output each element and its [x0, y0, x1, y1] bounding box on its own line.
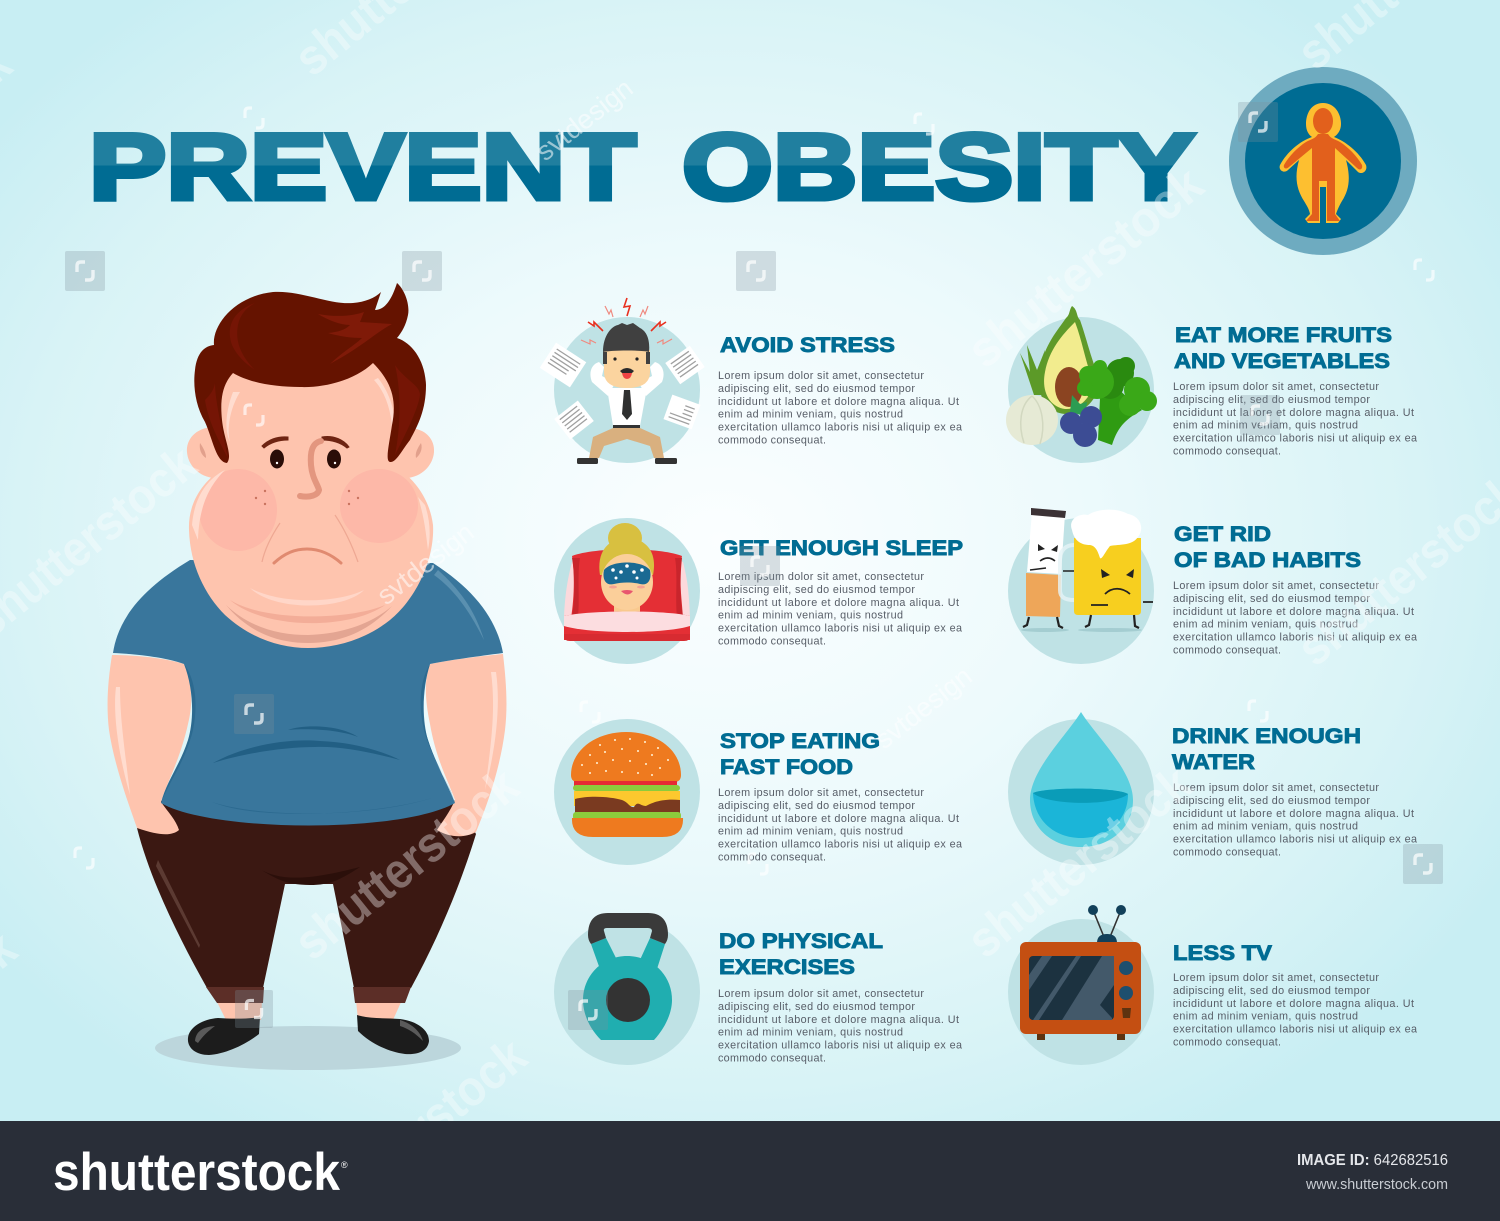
body text: exercitation ullamco laboris nisi ut aliquip ex ea	[1173, 1024, 1417, 1036]
eyes	[270, 450, 284, 468]
body text: enim ad minim veniam, quis nostrud	[1173, 420, 1358, 432]
body text: incididunt ut labore et dolore magna aliqua. Ut	[718, 1014, 959, 1026]
body text	[1173, 782, 1417, 858]
heading: GET ENOUGH SLEEP	[720, 537, 963, 560]
shirt and tie	[607, 388, 647, 426]
icon: sleeping woman	[554, 518, 700, 664]
body text: enim ad minim veniam, quis nostrud	[718, 1027, 903, 1039]
body text: commodo consequat.	[718, 434, 826, 446]
body text: commodo consequat.	[1173, 446, 1281, 458]
heading line two: WATER	[1172, 751, 1255, 774]
body text	[1173, 381, 1417, 458]
left arm	[108, 655, 191, 834]
left ankle	[216, 1000, 262, 1020]
top bun	[571, 732, 681, 782]
body text: adipiscing elit, sed do eiusmod tempor	[718, 584, 915, 596]
nose	[300, 441, 321, 497]
ground shadows	[1021, 628, 1069, 632]
image id: IMAGE ID: 642682516	[1297, 1152, 1448, 1169]
icon: burger	[554, 719, 700, 865]
body text: enim ad minim veniam, quis nostrud	[1173, 619, 1358, 631]
tomato	[574, 781, 677, 786]
footer logo: shutterstock	[53, 1143, 340, 1202]
trousers	[137, 800, 476, 988]
body text: commodo consequat.	[1173, 1036, 1281, 1048]
sleep mask	[603, 562, 651, 584]
cigarette	[1027, 512, 1065, 574]
icon: kettlebell	[554, 913, 700, 1065]
forehead shine	[226, 392, 240, 442]
body text: exercitation ullamco laboris nisi ut aliquip ex ea	[1173, 632, 1417, 644]
heading line two: OF BAD HABITS	[1174, 549, 1361, 572]
icon: stressed office man	[540, 298, 705, 464]
blanket	[564, 612, 690, 640]
body text	[1173, 580, 1417, 656]
body text: commodo consequat.	[718, 852, 826, 864]
body text: incididunt ut labore et dolore magna aliqua. Ut	[1173, 407, 1414, 419]
heading line one: EAT MORE FRUITS	[1175, 324, 1392, 347]
papers	[540, 343, 705, 439]
man character	[108, 283, 506, 1070]
body text: adipiscing elit, sed do eiusmod tempor	[718, 1001, 915, 1013]
registered mark: ®	[341, 1160, 348, 1170]
cheese and patty	[574, 791, 680, 806]
stock watermarks: svtdesign	[530, 73, 639, 167]
heading: LESS TV	[1173, 942, 1272, 965]
item: get enough sleep	[554, 518, 963, 664]
icon: fruit and vegetables	[1006, 306, 1157, 463]
lettuce top	[573, 785, 680, 791]
cheek blush	[199, 469, 277, 551]
body text: exercitation ullamco laboris nisi ut aliquip ex ea	[718, 839, 962, 851]
body text: Lorem ipsum dolor sit amet, consectetur	[718, 370, 924, 382]
item: less tv	[1008, 905, 1417, 1065]
body text: exercitation ullamco laboris nisi ut aliquip ex ea	[718, 623, 962, 635]
hair	[194, 283, 426, 463]
item: do physical exercises	[554, 913, 962, 1065]
icon: water drop	[1008, 712, 1154, 865]
right ear	[388, 428, 434, 480]
face	[601, 554, 653, 610]
stock watermarks: svtdesign	[869, 661, 978, 755]
body text	[718, 370, 962, 446]
heading line one: DO PHYSICAL	[719, 930, 883, 953]
body text: commodo consequat.	[718, 636, 826, 648]
lettuce bottom	[573, 812, 681, 820]
arms	[590, 362, 664, 396]
cigarette legs	[1023, 617, 1063, 628]
item: stop eating fast food	[554, 719, 962, 865]
foam	[1071, 510, 1141, 558]
chin folds	[250, 588, 364, 606]
freckles	[255, 490, 359, 505]
face and neck	[189, 360, 433, 648]
title: OBESITY	[682, 114, 1195, 219]
body text: incididunt ut labore et dolore magna aliqua. Ut	[718, 597, 959, 609]
mouth	[274, 549, 341, 563]
body text: enim ad minim veniam, quis nostrud	[1173, 821, 1358, 833]
heading line one: GET RID	[1174, 523, 1271, 546]
body text: enim ad minim veniam, quis nostrud	[718, 610, 903, 622]
beer face	[1101, 569, 1134, 578]
body text: adipiscing elit, sed do eiusmod tempor	[718, 383, 915, 395]
body text: Lorem ipsum dolor sit amet, consectetur	[718, 988, 924, 1000]
right arm	[426, 654, 506, 836]
trousers	[589, 428, 664, 458]
body text: enim ad minim veniam, quis nostrud	[718, 826, 903, 838]
left shoe	[188, 1017, 260, 1055]
shoes	[577, 458, 598, 464]
body text: enim ad minim veniam, quis nostrud	[1173, 1011, 1358, 1023]
right shoe	[357, 1015, 429, 1054]
stress bolts	[588, 298, 666, 331]
eyebrows	[262, 437, 288, 448]
cigarette face	[1038, 544, 1058, 552]
item: get rid of bad habits	[1008, 508, 1417, 664]
t-shirt	[113, 560, 503, 826]
heading line two: EXERCISES	[719, 956, 855, 979]
body text: adipiscing elit, sed do eiusmod tempor	[718, 800, 915, 812]
body text: adipiscing elit, sed do eiusmod tempor	[1173, 593, 1370, 605]
body text: Lorem ipsum dolor sit amet, consectetur	[1173, 782, 1379, 794]
hair highlights	[318, 312, 392, 364]
blueberries	[1060, 406, 1102, 447]
icon: television	[1008, 905, 1154, 1065]
leaves	[1070, 395, 1087, 416]
spring onion	[1020, 345, 1045, 395]
body text: commodo consequat.	[1173, 644, 1281, 656]
body text: incididunt ut labore et dolore magna aliqua. Ut	[718, 813, 959, 825]
belt	[613, 425, 640, 428]
broccoli	[1098, 385, 1142, 445]
body text: incididunt ut labore et dolore magna aliqua. Ut	[718, 396, 959, 408]
body text: exercitation ullamco laboris nisi ut aliquip ex ea	[1173, 834, 1417, 846]
title	[89, 114, 1195, 219]
body text: commodo consequat.	[718, 1052, 826, 1064]
item: eat more fruits and vegetables	[1006, 306, 1417, 463]
hair and bun	[608, 523, 642, 553]
stock watermarks: shutterstock	[284, 757, 529, 971]
heading line two: AND VEGETABLES	[1174, 350, 1390, 373]
left ear	[187, 427, 232, 480]
body text	[718, 787, 962, 864]
body text: exercitation ullamco laboris nisi ut aliquip ex ea	[718, 1040, 962, 1052]
body text	[1173, 972, 1417, 1048]
ground shadow	[155, 1026, 461, 1070]
stock watermarks: svtdesign	[371, 517, 480, 611]
wrinkles	[262, 515, 358, 562]
right ankle	[356, 1000, 402, 1020]
bottom bun	[572, 818, 683, 837]
body text: exercitation ullamco laboris nisi ut aliquip ex ea	[718, 422, 962, 434]
beer legs	[1085, 615, 1139, 628]
body text: incididunt ut labore et dolore magna aliqua. Ut	[1173, 606, 1414, 618]
trouser cuffs	[206, 987, 264, 1003]
website: www.shutterstock.com	[1305, 1177, 1448, 1193]
stock watermarks: shutterstock	[957, 755, 1202, 969]
heading: AVOID STRESS	[720, 334, 895, 357]
body text: Lorem ipsum dolor sit amet, consectetur	[1173, 580, 1379, 592]
body text: Lorem ipsum dolor sit amet, consectetur	[718, 571, 924, 583]
heading line two: FAST FOOD	[720, 756, 853, 779]
item: drink enough water	[1008, 712, 1417, 865]
body text: adipiscing elit, sed do eiusmod tempor	[1173, 795, 1370, 807]
body text: Lorem ipsum dolor sit amet, consectetur	[1173, 381, 1379, 393]
neck and pajama	[614, 605, 640, 615]
stock watermarks: shutterstock	[957, 156, 1214, 379]
item: avoid stress	[540, 298, 962, 464]
title: PREVENT	[89, 114, 636, 219]
eyes and mouth	[613, 357, 617, 361]
body text	[718, 988, 962, 1064]
face	[604, 350, 650, 388]
pillow	[564, 553, 690, 616]
body text: Lorem ipsum dolor sit amet, consectetur	[718, 787, 924, 799]
body text: incididunt ut labore et dolore magna aliqua. Ut	[1173, 808, 1414, 820]
hair	[603, 323, 649, 352]
avocado	[1039, 306, 1099, 414]
footer bar	[0, 1121, 1500, 1221]
body text	[718, 571, 962, 648]
body text: Lorem ipsum dolor sit amet, consectetur	[1173, 972, 1379, 984]
icon: angry cigarette and beer	[1008, 508, 1154, 664]
body text: commodo consequat.	[1173, 846, 1281, 858]
body text: exercitation ullamco laboris nisi ut aliquip ex ea	[1173, 433, 1417, 445]
body text: adipiscing elit, sed do eiusmod tempor	[1173, 985, 1370, 997]
icon: obesity body badge	[1229, 67, 1417, 255]
garlic	[1006, 395, 1058, 445]
body text: adipiscing elit, sed do eiusmod tempor	[1173, 394, 1370, 406]
beer mug	[1074, 538, 1141, 615]
heading line one: DRINK ENOUGH	[1172, 725, 1361, 748]
body text: enim ad minim veniam, quis nostrud	[718, 409, 903, 421]
lips and cheeks	[621, 590, 633, 594]
body text: incididunt ut labore et dolore magna aliqua. Ut	[1173, 998, 1414, 1010]
heading line one: STOP EATING	[720, 730, 880, 753]
